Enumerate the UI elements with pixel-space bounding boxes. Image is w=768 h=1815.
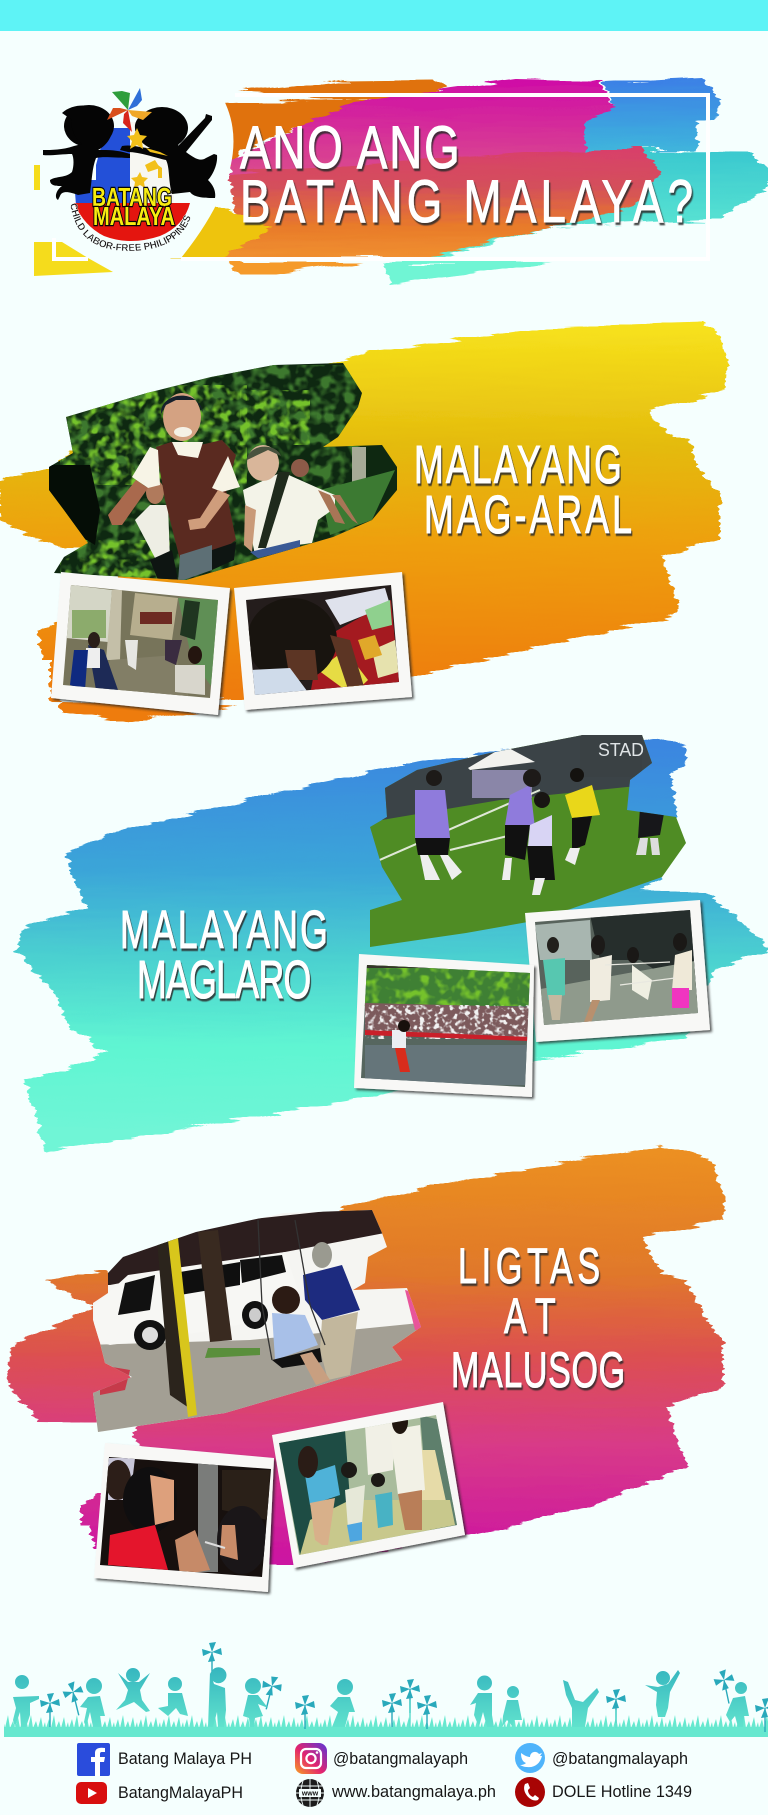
players (415, 770, 462, 880)
polaroid: family walking (272, 1402, 465, 1568)
logo wordmark (92, 182, 175, 231)
heading: malayang mag-aral (414, 435, 632, 545)
logo stars and islands (127, 128, 168, 188)
children silhouettes (13, 1667, 749, 1727)
header brush strokes (170, 77, 768, 285)
facebook (77, 1743, 252, 1776)
main photo: children running (49, 363, 397, 580)
heading: ligtas at malusog (451, 1239, 625, 1399)
website: www.batangmalaya.ph (331, 1782, 496, 1801)
boy 3 behind (135, 480, 178, 580)
header banner (34, 76, 768, 285)
website: www (301, 1790, 319, 1798)
youtube (76, 1782, 243, 1804)
heading: ligtas at malusog: MALUSOG (451, 1343, 625, 1399)
polaroid: school gathering (354, 954, 535, 1097)
logo arc tagline: CHILD LABOR-FREE PHILIPPINES (70, 203, 190, 252)
main photo: football field (370, 735, 686, 947)
main photo: football field: STAD (598, 740, 644, 760)
heading: malayang maglaro (120, 900, 328, 1010)
yellow-orange brush (0, 322, 728, 722)
students (88, 645, 118, 690)
trees and pole (158, 1239, 187, 1406)
heading: malayang maglaro: MAGLARO (137, 950, 311, 1010)
grass (4, 1714, 768, 1737)
header title: BATANG MALAYA? (240, 169, 693, 236)
boy 1 (108, 393, 240, 582)
footer contacts (76, 1743, 692, 1807)
header title: ANO ANG (240, 115, 460, 182)
panel: malayang maglaro (17, 730, 768, 1152)
twitter (515, 1743, 688, 1773)
heading: ligtas at malusog: LIGTAS (458, 1239, 600, 1295)
heading: malayang maglaro: MALAYANG (120, 900, 328, 960)
polaroid: jump rope (525, 900, 710, 1042)
top teal bar (0, 0, 768, 31)
logo backing shape (50, 90, 233, 258)
panel: malayang mag-aral (0, 322, 728, 722)
logo pinwheel (107, 88, 152, 132)
header title (240, 115, 693, 236)
footer silhouette strip (4, 1642, 768, 1737)
website (296, 1779, 496, 1807)
boy 2 (243, 445, 358, 558)
header frame (54, 95, 708, 259)
polaroid: tooth brushing (94, 1443, 276, 1592)
man (303, 1242, 360, 1380)
twitter: @batangmalayaph (552, 1749, 688, 1768)
van (93, 1252, 298, 1350)
logo shield (74, 122, 190, 241)
instagram: @batangmalayaph (333, 1749, 468, 1768)
instagram (295, 1743, 468, 1774)
heading: ligtas at malusog: AT (504, 1289, 556, 1345)
logo wordmark: BATANG (92, 182, 172, 212)
facebook: Batang Malaya PH (118, 1749, 252, 1768)
girl on swing (258, 1220, 330, 1385)
polaroid: children crafts (234, 572, 412, 710)
main photo: swing (85, 1205, 430, 1435)
logo children silhouettes (43, 105, 217, 200)
family figures (305, 1465, 340, 1505)
logo (43, 88, 218, 252)
youtube: BatangMalayaPH (118, 1783, 243, 1802)
blue-teal brush (17, 737, 768, 1152)
heading: malayang mag-aral: MAG-ARAL (424, 485, 632, 545)
logo wordmark: MALAYA (93, 201, 175, 231)
polaroid: hallway classroom (51, 572, 230, 715)
heading: malayang mag-aral: MALAYANG (414, 435, 622, 495)
yellow corner pieces (34, 165, 113, 276)
boy 4 behind (291, 459, 309, 477)
panel: ligtas at malusog (7, 1145, 725, 1592)
hotline (515, 1777, 692, 1807)
hotline: DOLE Hotline 1349 (552, 1782, 692, 1801)
orange-magenta brush (7, 1145, 725, 1567)
pinwheels (40, 1642, 768, 1732)
